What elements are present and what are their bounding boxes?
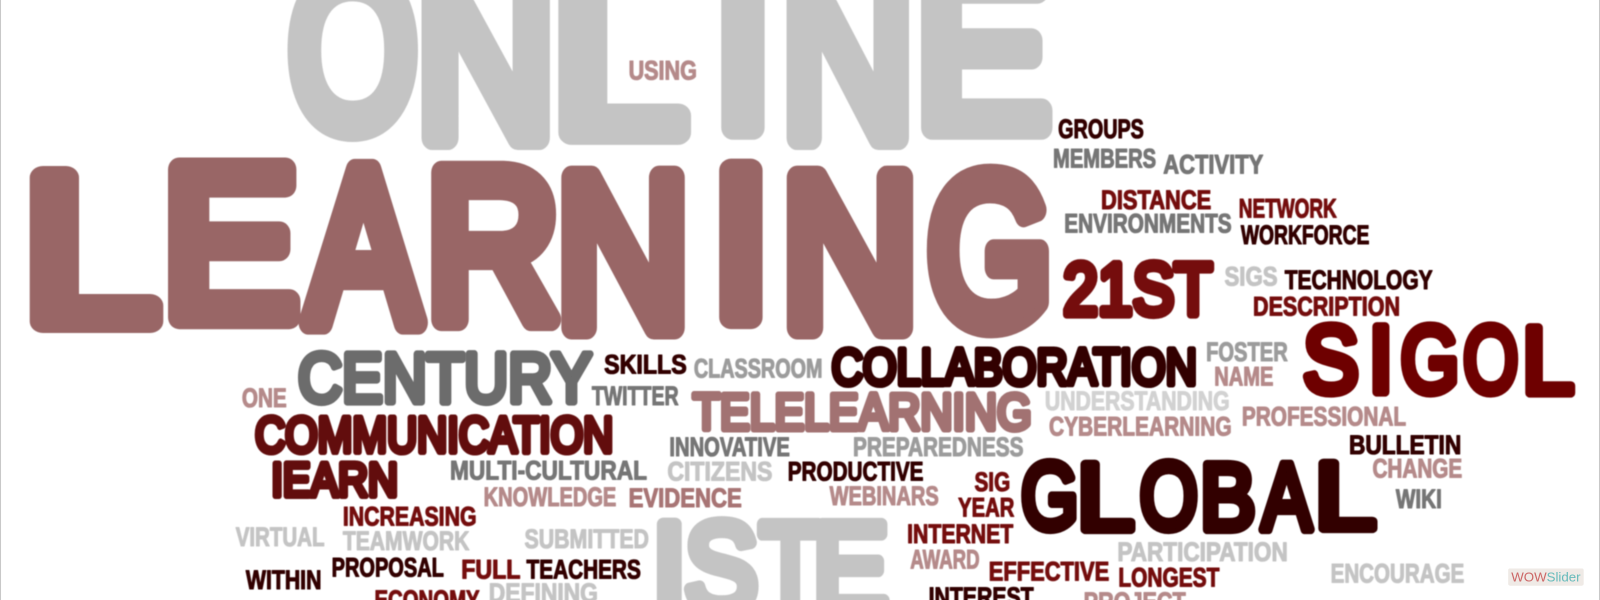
word: BULLETIN: BULLETIN (1349, 430, 1461, 460)
word: WEBINARS: WEBINARS (830, 481, 939, 511)
word: SIGOL: S (1303, 306, 1359, 412)
word: UNDERSTANDING: UNDERSTANDING (1045, 386, 1230, 416)
badge: WOWSlider watermark: WOWSlider (1511, 570, 1581, 585)
word: PROPOSAL: PROPOSAL (332, 553, 444, 583)
word: SIGOL: I (1368, 306, 1393, 412)
word: LONGEST: LONGEST (1118, 563, 1219, 593)
word: LEARNING: N (782, 131, 918, 375)
word: SIGOL (1303, 306, 1574, 413)
word: DESCRIPTION: DESCRIPTION (1253, 291, 1400, 321)
word: LEARNING: L (23, 132, 158, 366)
word: TECHNOLOGY: TECHNOLOGY (1285, 265, 1433, 295)
word: WIKI: WIKI (1396, 484, 1442, 514)
word: INTERNET: INTERNET (907, 519, 1013, 549)
word: LEARNING: R (426, 127, 560, 365)
word: PREPAREDNESS: PREPAREDNESS (853, 432, 1023, 462)
word: EVIDENCE: EVIDENCE (629, 483, 742, 513)
word: TEAMWORK: TEAMWORK (343, 526, 469, 556)
word: SIGOL: L (1522, 307, 1574, 413)
word: SUBMITTED: SUBMITTED (524, 524, 649, 554)
word: CLASSROOM: CLASSROOM (694, 354, 822, 384)
word: CHANGE: CHANGE (1372, 454, 1462, 484)
word: LEARNING: A (307, 124, 420, 370)
word: AWARD: AWARD (910, 544, 980, 574)
word: EFFECTIVE: EFFECTIVE (989, 557, 1109, 587)
word: LEARNING: N (556, 130, 690, 374)
word: LEARNING: I (711, 125, 771, 363)
word: ONLINE (289, 0, 1050, 186)
word: SIGOL: O (1463, 306, 1518, 412)
word: FULL: FULL (461, 555, 520, 585)
word: GLOBAL: A (1262, 445, 1311, 551)
word: INNOVATIVE: INNOVATIVE (669, 432, 790, 462)
word: IEARN: IEARN (271, 454, 398, 506)
word: GROUPS: GROUPS (1058, 114, 1144, 144)
word: SIG: SIG (974, 467, 1010, 497)
word: YEAR: YEAR (958, 492, 1014, 522)
word: ISTE (652, 498, 889, 600)
word: GLOBAL: G (1021, 444, 1079, 550)
word: SIGS: SIGS (1224, 262, 1278, 292)
word: ENVIRONMENTS: ENVIRONMENTS (1064, 209, 1232, 239)
word: GLOBAL: O (1140, 444, 1198, 550)
word: PRODUCTIVE: PRODUCTIVE (788, 457, 923, 487)
word: ACTIVITY: ACTIVITY (1163, 149, 1264, 179)
word: MEMBERS: MEMBERS (1053, 143, 1156, 173)
word: GLOBAL: B (1200, 444, 1256, 550)
word: LEARNING: G (928, 131, 1052, 370)
word: FOSTER: FOSTER (1206, 337, 1288, 367)
word: TEACHERS: TEACHERS (527, 555, 641, 585)
word: DISTANCE: DISTANCE (1101, 185, 1211, 215)
word: GLOBAL: L (1077, 444, 1134, 550)
word: PARTICIPATION: PARTICIPATION (1117, 537, 1288, 567)
word: TWITTER: TWITTER (592, 381, 679, 411)
word: MULTI-CULTURAL: MULTI-CULTURAL (450, 456, 647, 486)
word: ENCOURAGE: ENCOURAGE (1331, 559, 1464, 589)
word: GLOBAL (1021, 443, 1376, 551)
word: SIGOL: G (1401, 307, 1459, 413)
word: ONE: ONE (242, 383, 287, 413)
word: CITIZENS: CITIZENS (667, 457, 772, 487)
word: NETWORK: NETWORK (1239, 193, 1337, 223)
word: WITHIN: WITHIN (246, 565, 321, 595)
word: SKILLS: SKILLS (604, 349, 687, 379)
word: USING: USING (629, 56, 697, 86)
word: CENTURY: CENTURY (298, 339, 592, 417)
word: INCREASING: INCREASING (343, 502, 477, 532)
word: VIRTUAL: VIRTUAL (236, 522, 324, 552)
word: LEARNING (23, 124, 1052, 375)
word: NAME: NAME (1214, 362, 1273, 392)
word: WORKFORCE: WORKFORCE (1241, 220, 1369, 250)
word: COLLABORATION: COLLABORATION (832, 339, 1197, 396)
word: KNOWLEDGE: KNOWLEDGE (484, 482, 616, 512)
word: GLOBAL: L (1315, 443, 1376, 549)
word: COMMUNICATION: COMMUNICATION (255, 407, 613, 463)
word: 21ST: 21ST (1063, 247, 1212, 330)
word: LEARNING: E (163, 124, 298, 364)
word: CYBERLEARNING: CYBERLEARNING (1049, 412, 1232, 442)
word: TELELEARNING: TELELEARNING (693, 384, 1032, 441)
word: PROFESSIONAL: PROFESSIONAL (1242, 402, 1406, 432)
